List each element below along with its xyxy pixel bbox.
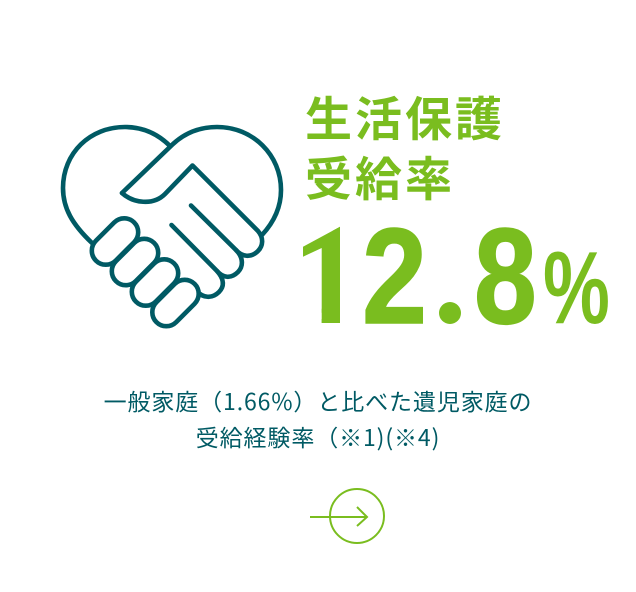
heading: 生活保護: [305, 81, 505, 150]
statistic: 12.8%: 2: [362, 200, 427, 352]
description text: [104, 383, 532, 453]
description text: 受給経験率（※1)(※4): [196, 419, 440, 453]
statistic: 12.8%: %: [543, 230, 610, 346]
statistic: 12.8%: 1: [286, 196, 379, 353]
statistic: 12.8%: [303, 226, 608, 326]
arrow button: [310, 488, 385, 544]
statistic: 12.8%: .: [426, 172, 473, 362]
heading: 受給率: [305, 141, 455, 210]
icon: handshake heart: [60, 124, 284, 328]
description text: 一般家庭（1.66%）と比べた遺児家庭の: [104, 383, 532, 417]
heading: [305, 81, 505, 210]
statistic: 12.8%: 8: [474, 201, 537, 352]
